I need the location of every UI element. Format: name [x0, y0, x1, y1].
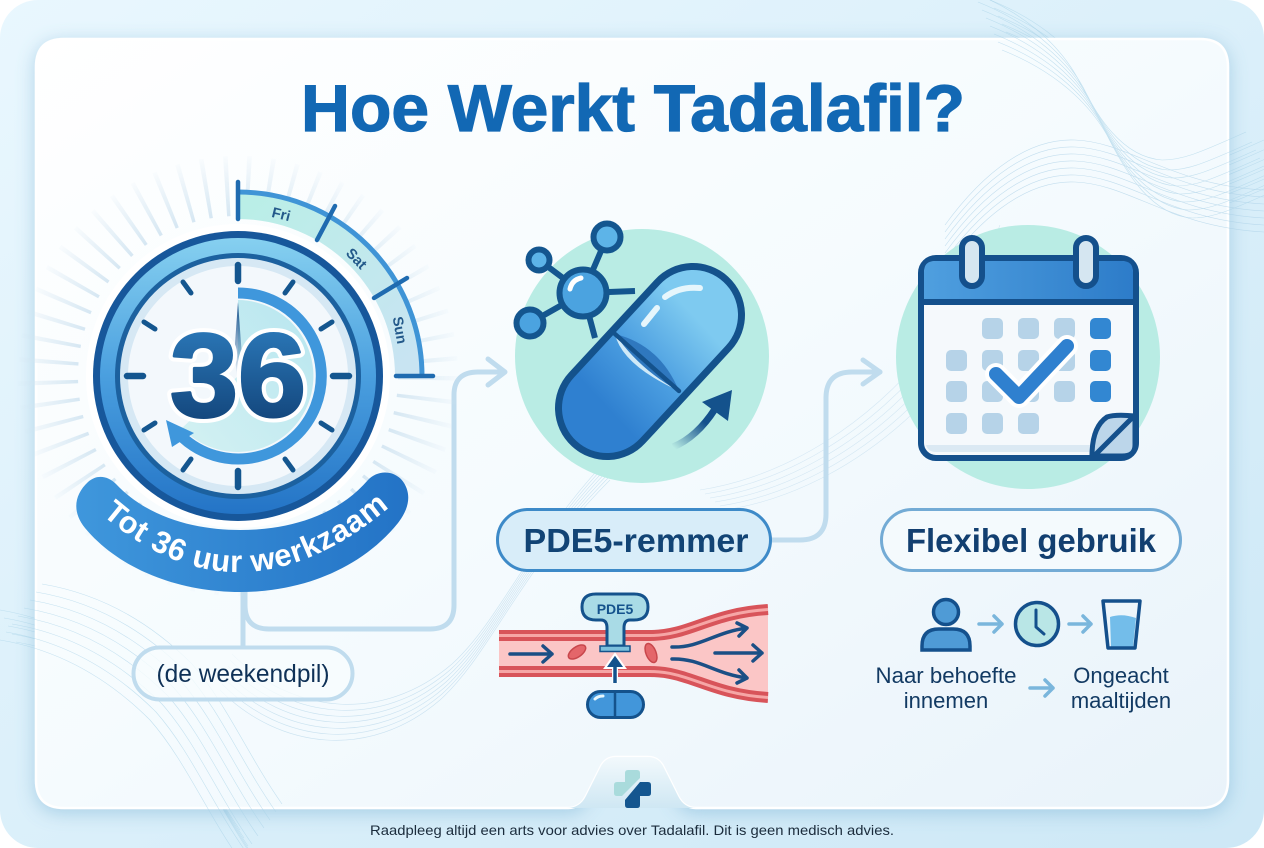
clock face: [86, 224, 390, 528]
label: PDE5-remmer: PDE5-remmer: [524, 522, 749, 559]
icon: clock: [1016, 602, 1058, 646]
number 36: 36: [170, 310, 306, 442]
banner: tot 36 uur werkzaam: Tot 36 uur werkzaam: [108, 498, 388, 572]
label: flexibel gebruik: Flexibel gebruik: [906, 522, 1157, 559]
icon: molecule: [516, 224, 635, 338]
icon: glass of water: [1103, 601, 1140, 648]
connector: pill to calendar: [772, 360, 880, 540]
PDE5 enzyme: [582, 594, 648, 652]
radiating rays: [48, 186, 428, 566]
icon: medical cross logo: [614, 770, 651, 808]
pill: de weekendpil: [134, 648, 352, 700]
PDE5 enzyme: PDE5: [597, 601, 633, 617]
page fold: [1092, 415, 1135, 456]
panel: calendar illustration: [896, 225, 1160, 489]
panel: 36 hour clock: [35, 163, 448, 592]
text: ongeacht maaltijden: [1071, 663, 1171, 713]
icon: capsule: [607, 288, 700, 408]
small pill: [588, 692, 644, 718]
red blood cells: [566, 642, 588, 662]
icon: check mark: [996, 346, 1067, 397]
icon: calendar: [921, 238, 1136, 458]
icon: upward arrow: [673, 390, 732, 447]
progress sweep: [182, 300, 313, 452]
arrow: [979, 616, 1002, 632]
hour ticks: [127, 265, 349, 487]
arrow: [1030, 680, 1053, 696]
number 36: 36: [170, 310, 306, 442]
weekend arc: Fri Sat Sun: Sun: [389, 315, 409, 345]
icon row: person, clock, glass: [922, 600, 1140, 650]
label: flexibel gebruik: [882, 510, 1180, 570]
binder rings: [962, 238, 982, 286]
weekend arc: Fri Sat Sun: Sat: [342, 246, 370, 273]
inhibitor arrow: [605, 654, 625, 683]
text: naar behoefte innemen: innemen: [904, 688, 988, 713]
text: naar behoefte innemen: [876, 663, 1016, 713]
text: naar behoefte innemen: Naar behoefte: [876, 663, 1016, 688]
flow arrows: [510, 623, 762, 683]
diagram: blood vessel with PDE5: [499, 594, 768, 718]
vessel: [499, 605, 768, 702]
weekend arc: Fri Sat Sun: [238, 182, 433, 376]
arrow: [1069, 616, 1091, 632]
clock hand: [234, 302, 242, 378]
footer tab: [567, 757, 696, 808]
pill: de weekendpil: (de weekendpil): [156, 660, 330, 688]
footer disclaimer: Raadpleeg altijd een arts voor advies over Tadalafil. Dit is geen medisch advies.: [370, 822, 894, 838]
label: PDE5-remmer: [498, 510, 770, 570]
weekend arc: Fri Sat Sun: Fri: [270, 205, 292, 225]
panel: capsule illustration: [515, 224, 769, 483]
icon: person: [922, 600, 970, 650]
text: ongeacht maaltijden: maaltijden: [1071, 688, 1171, 713]
connector: clock to pill: [243, 359, 505, 646]
text: ongeacht maaltijden: Ongeacht: [1073, 663, 1169, 688]
title: Hoe Werkt Tadalafil?: [301, 71, 965, 145]
date cells: [946, 318, 1075, 434]
